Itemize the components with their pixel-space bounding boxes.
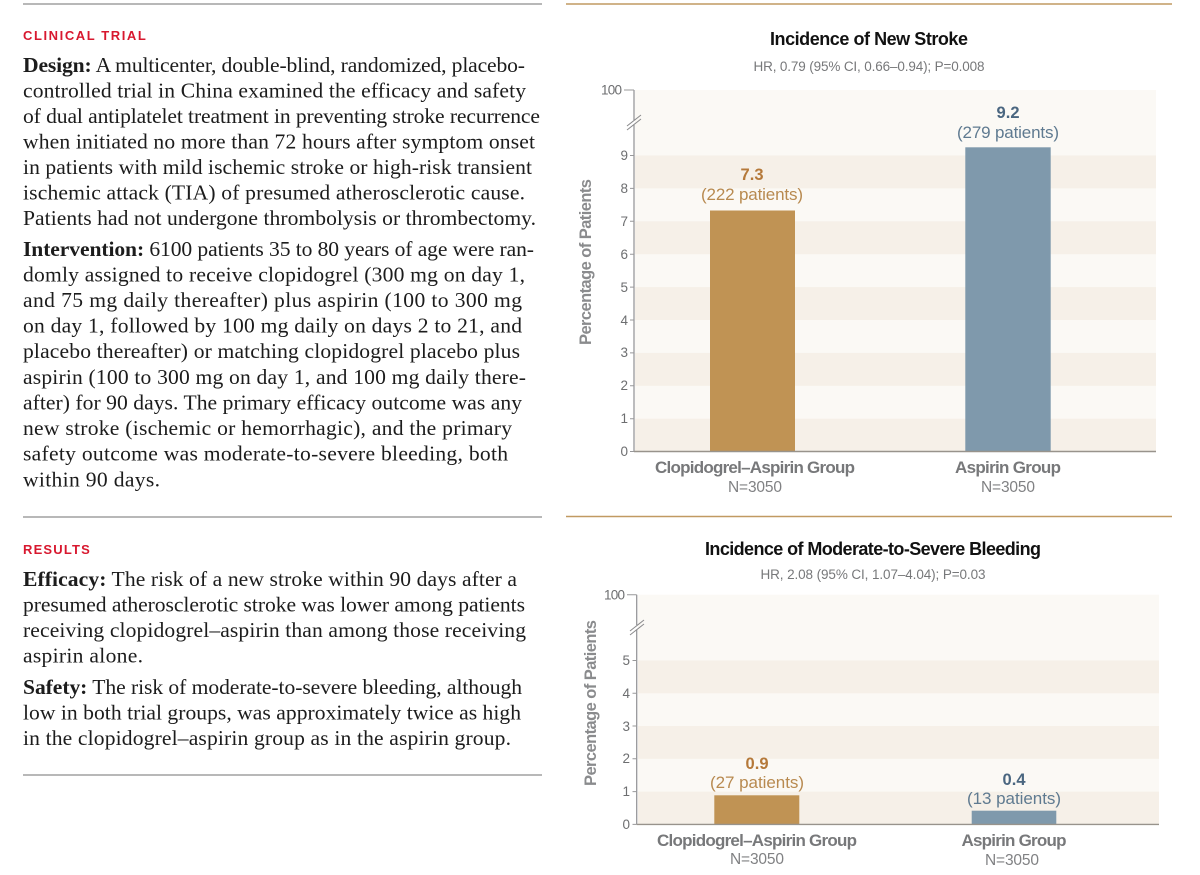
y axis: bleeding: 2 [622, 751, 630, 766]
value label: clopidogrel-aspirin stroke: 7.3 [740, 166, 764, 184]
group label: aspirin stroke: N=3050 [981, 479, 1035, 496]
panel: incidence of new stroke [577, 29, 1156, 496]
y axis: bleeding [604, 588, 644, 832]
chart title: bleeding: Incidence of Moderate-to-Severe Bleeding [705, 539, 1041, 559]
value label: clopidogrel-aspirin bleeding: (27 patients) [710, 773, 804, 792]
y axis label: new stroke: Percentage of Patients [577, 179, 595, 345]
bar: aspirin stroke [965, 147, 1051, 452]
group label: clopidogrel-aspirin stroke: Clopidogrel–Aspirin Group [655, 458, 855, 477]
text block: design: in patients with mild ischemic stroke or high-risk transient [23, 155, 532, 179]
y axis: new stroke: 100 [601, 82, 622, 98]
text block: efficacy: aspirin alone. [23, 644, 143, 668]
group label: clopidogrel-aspirin bleeding: N=3050 [730, 851, 784, 868]
text block: intervention: within 90 days. [23, 468, 160, 492]
heading: results: RESULTS [23, 542, 91, 557]
y axis: new stroke: 0 [620, 444, 628, 459]
x axis baseline: bleeding [637, 823, 1159, 825]
y axis: bleeding: 100 [604, 588, 625, 602]
group label: clopidogrel-aspirin stroke: N=3050 [728, 479, 782, 496]
text block: efficacy: receiving clopidogrel–aspirin than among those receiving [23, 618, 526, 642]
value label: aspirin bleeding: 0.4 [1002, 771, 1026, 789]
value label: clopidogrel-aspirin bleeding: 0.9 [746, 755, 768, 773]
plot background: new stroke [635, 90, 1156, 452]
hazard ratio: new stroke: HR, 0.79 (95% CI, 0.66–0.94); P=0.008 [754, 59, 984, 74]
text block: efficacy [23, 567, 526, 668]
value label: clopidogrel-aspirin stroke [701, 166, 803, 204]
x axis baseline: new stroke [634, 450, 1156, 452]
y axis: new stroke: 9 [620, 148, 628, 163]
text block: intervention: placebo thereafter) or matching clopidogrel placebo plus [23, 339, 520, 363]
value label: aspirin bleeding [967, 771, 1061, 808]
y axis: bleeding: 5 [622, 653, 630, 668]
y axis: new stroke: 1 [620, 411, 628, 426]
text block: safety: in the clopidogrel–aspirin group as in the aspirin group. [23, 726, 511, 750]
text block: design: Design: A multicenter, double-blind, randomized, placebo- [23, 53, 525, 77]
y axis: bleeding: 1 [622, 784, 630, 799]
text block: design: when initiated no more than 72 hours after symptom onset [23, 130, 535, 154]
hazard ratio: bleeding: HR, 2.08 (95% CI, 1.07–4.04); P=0.03 [760, 567, 986, 582]
y axis: new stroke [601, 82, 641, 459]
y axis: new stroke: 6 [620, 247, 628, 262]
group label: aspirin stroke: Aspirin Group [955, 458, 1061, 477]
bar: clopidogrel-aspirin bleeding [714, 795, 799, 824]
y axis: bleeding: 3 [622, 719, 630, 734]
text block: safety [23, 675, 522, 750]
value label: aspirin bleeding: (13 patients) [967, 789, 1061, 808]
text block: intervention: after) for 90 days. The primary efficacy outcome was any [23, 390, 522, 414]
text block: design: Patients had not undergone thrombolysis or thrombectomy. [23, 206, 536, 230]
text block: intervention: on day 1, followed by 100 mg daily on days 2 to 21, and [23, 314, 522, 338]
plot background: bleeding [638, 595, 1159, 824]
group label: aspirin bleeding [962, 831, 1066, 869]
text block: intervention: and 75 mg daily thereafter) plus aspirin (100 to 300 mg [23, 288, 522, 312]
text block: efficacy: presumed atherosclerotic stroke was lower among patients [23, 592, 525, 616]
bar: clopidogrel-aspirin stroke [710, 210, 795, 452]
value label: clopidogrel-aspirin bleeding [710, 755, 804, 792]
value label: clopidogrel-aspirin stroke: (222 patients) [701, 185, 803, 204]
text block: intervention [23, 237, 534, 492]
y axis: new stroke: 2 [620, 378, 628, 393]
y axis: new stroke: 7 [620, 214, 628, 229]
text block: intervention: domly assigned to receive clopidogrel (300 mg on day 1, [23, 262, 525, 286]
text block: design [23, 53, 540, 230]
value label: aspirin stroke: (279 patients) [957, 123, 1059, 142]
y axis: bleeding: 0 [622, 817, 630, 832]
panel: incidence of moderate-to-severe bleeding [582, 539, 1159, 869]
y axis: new stroke: 4 [620, 313, 628, 328]
value label: aspirin stroke [957, 104, 1059, 142]
group label: clopidogrel-aspirin bleeding: Clopidogrel–Aspirin Group [657, 831, 857, 850]
text block: intervention: safety outcome was moderate-to-severe bleeding, both [23, 442, 508, 466]
text block: design: ischemic attack (TIA) of presumed atherosclerotic cause. [23, 180, 525, 204]
text block: safety: Safety: The risk of moderate-to-severe bleeding, although [23, 675, 522, 699]
text block: intervention: new stroke (ischemic or hemorrhagic), and the primary [23, 416, 512, 440]
group label: aspirin bleeding: N=3050 [985, 852, 1039, 869]
y axis label: bleeding: Percentage of Patients [582, 620, 600, 786]
value label: aspirin stroke: 9.2 [996, 104, 1020, 122]
chart title: new stroke: Incidence of New Stroke [770, 29, 968, 49]
heading: clinical trial: CLINICAL TRIAL [23, 28, 147, 43]
y axis: new stroke: 5 [620, 280, 628, 295]
group label: aspirin stroke [955, 458, 1061, 496]
y axis: new stroke: 3 [620, 345, 628, 360]
text block: intervention: aspirin (100 to 300 mg on day 1, and 100 mg daily there- [23, 365, 526, 389]
text block: safety: low in both trial groups, was approximately twice as high [23, 700, 521, 724]
bar: aspirin bleeding [972, 811, 1056, 824]
group label: aspirin bleeding: Aspirin Group [962, 831, 1066, 850]
y axis: new stroke: 8 [620, 181, 628, 196]
group label: clopidogrel-aspirin bleeding [657, 831, 857, 868]
text block: intervention: Intervention: 6100 patients 35 to 80 years of age were ran- [23, 237, 534, 261]
group label: clopidogrel-aspirin stroke [655, 458, 855, 496]
text block: design: of dual antiplatelet treatment in preventing stroke recurrence [23, 104, 540, 128]
text block: efficacy: Efficacy: The risk of a new stroke within 90 days after a [23, 567, 517, 591]
y axis: bleeding: 4 [622, 686, 630, 701]
text block: design: controlled trial in China examined the efficacy and safety [23, 78, 526, 102]
